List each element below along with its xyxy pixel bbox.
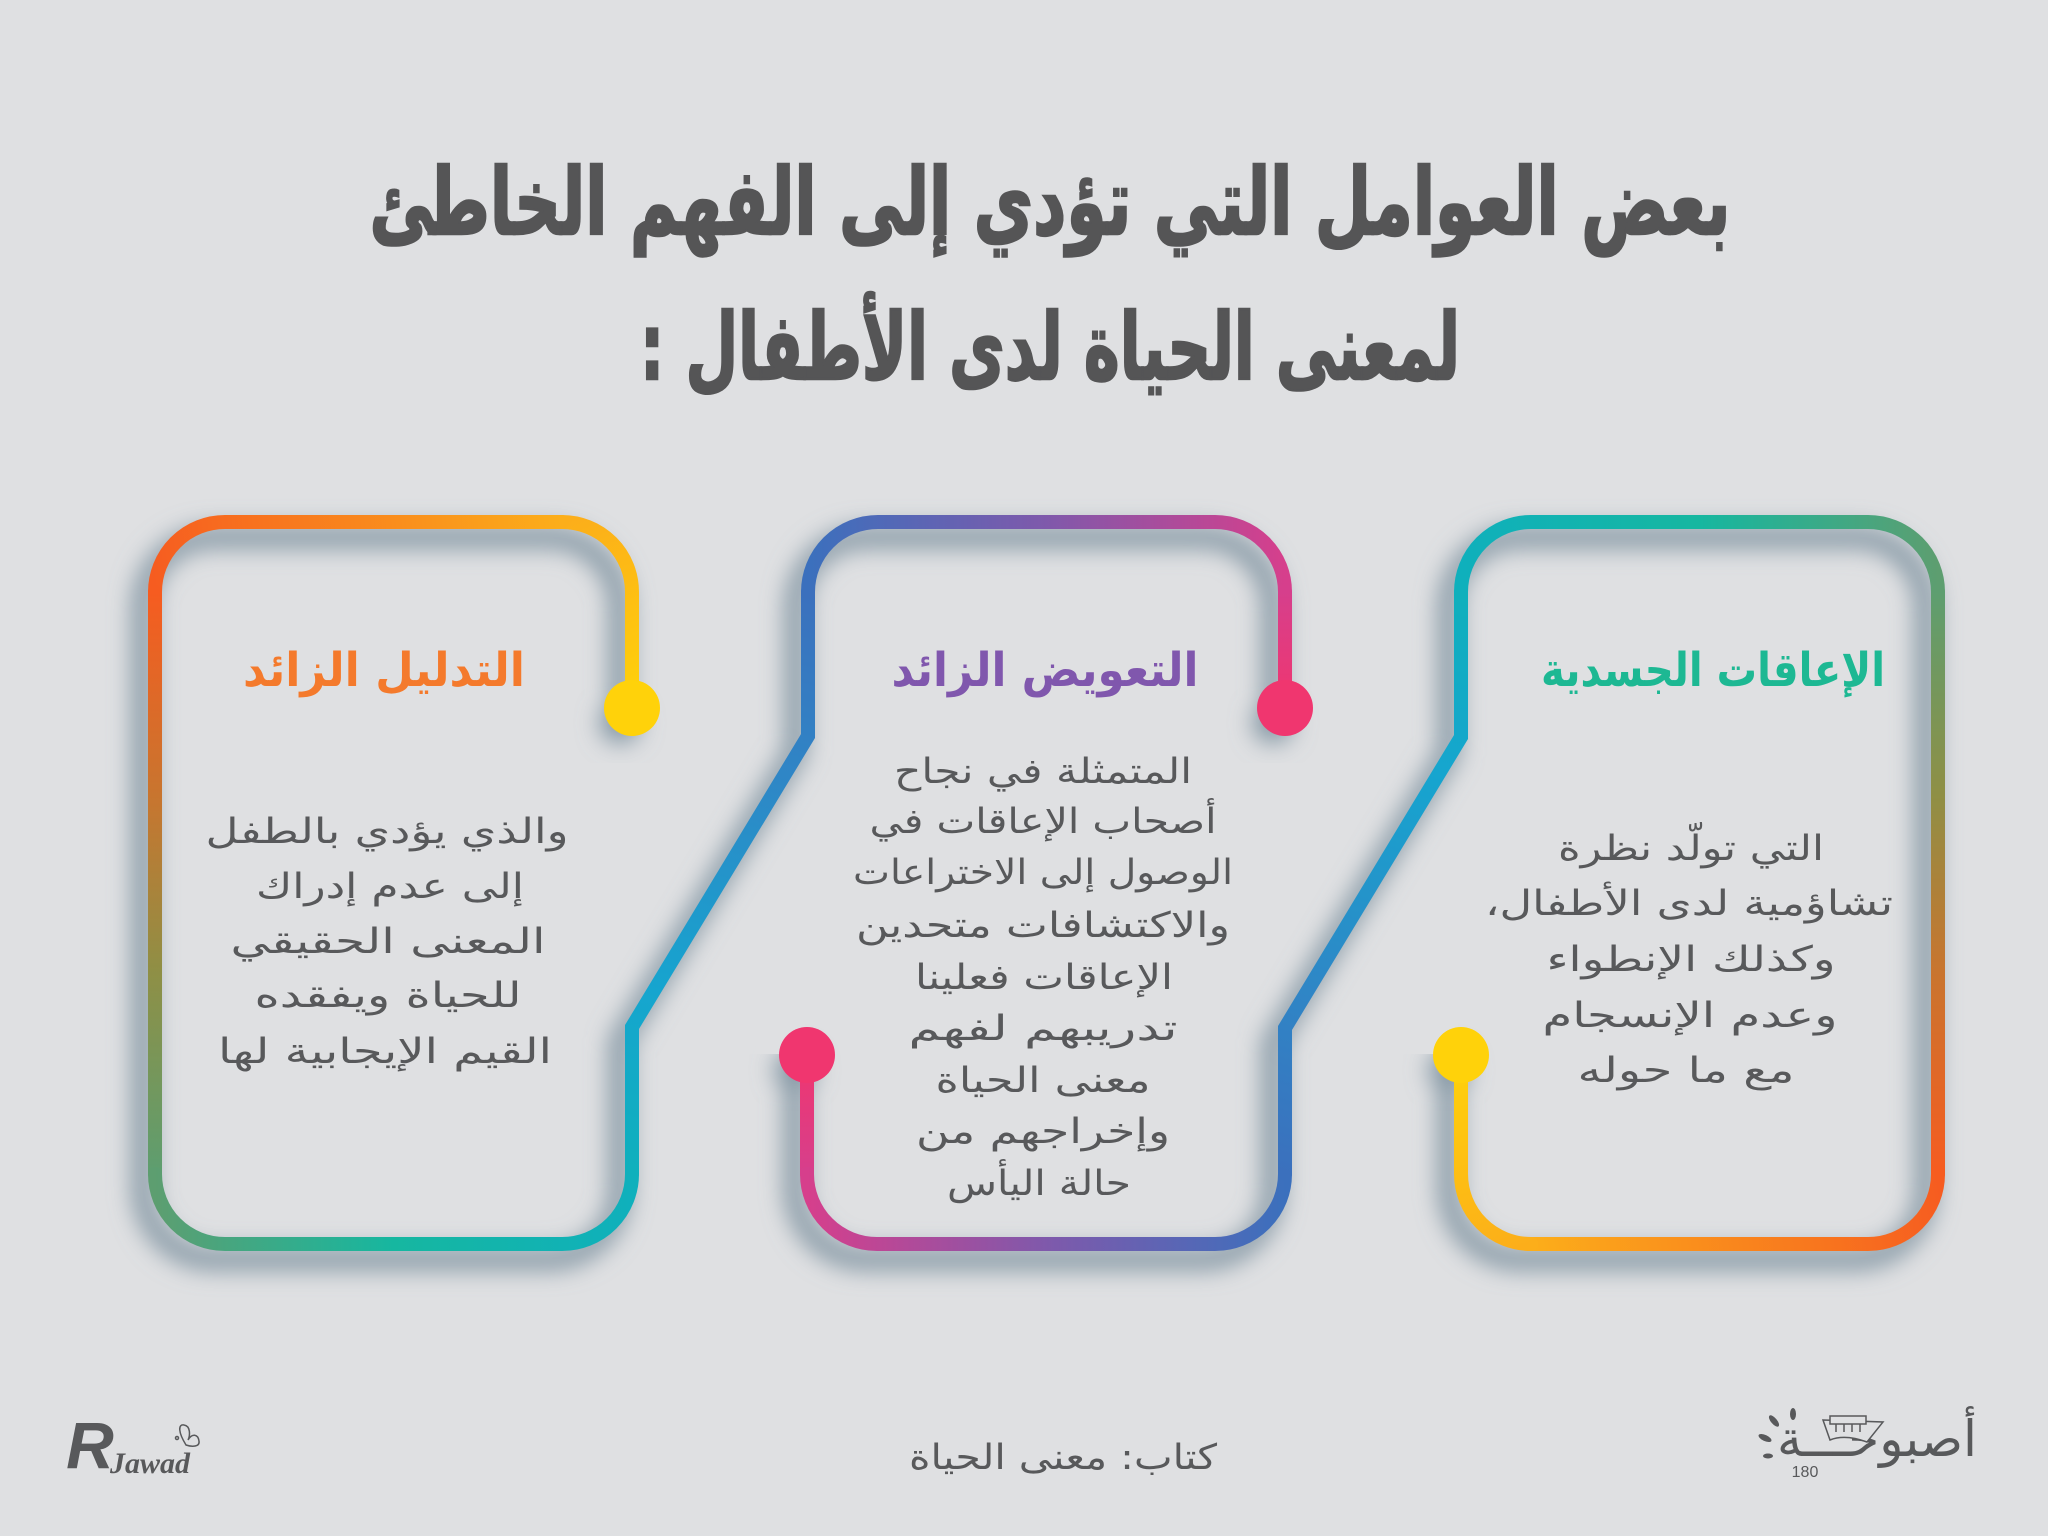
dot: yellow panel three	[1433, 1027, 1489, 1083]
heading: التعويض الزائد	[892, 643, 1198, 698]
panel: excessive compensation	[853, 643, 1233, 1204]
body text: مع ما حوله	[1578, 1051, 1794, 1091]
body text	[206, 812, 568, 1072]
body text: تدريبهم لفهم	[908, 1009, 1178, 1049]
connector: orange to pink line linking panels one and two	[155, 522, 1285, 1244]
panel: excessive pampering	[206, 643, 568, 1072]
body text: والذي يؤدي بالطفل	[206, 812, 568, 852]
icon: butterfly	[176, 1425, 199, 1446]
connector: pink to yellow line linking panels two and three	[807, 522, 1938, 1244]
logo: R Jawad signature: R	[66, 1408, 114, 1482]
body text: حالة اليأس	[947, 1159, 1131, 1204]
body text: وعدم الإنسجام	[1542, 996, 1838, 1036]
heading: الإعاقات الجسدية	[1541, 643, 1885, 698]
body text: تشاؤمية لدى الأطفال،	[1485, 881, 1893, 924]
body text: أصحاب الإعاقات في	[870, 798, 1216, 842]
dot: yellow panel one	[604, 680, 660, 736]
number 180: 180	[1792, 1464, 1818, 1481]
body text: إلى عدم إدراك	[256, 867, 524, 907]
dot: pink panel two bottom	[779, 1027, 835, 1083]
dot: pink panel two top	[1257, 680, 1313, 736]
shadow cut-off edges	[545, 763, 1458, 1054]
body text: معنى الحياة	[936, 1061, 1150, 1101]
connector shadows	[143, 537, 1926, 1259]
body text: التي تولّد نظرة	[1558, 821, 1824, 869]
panel: physical disabilities	[1485, 643, 1893, 1091]
body text: والاكتشافات متحدين	[856, 906, 1230, 946]
title: لمعنى الحياة لدى الأطفال :	[640, 292, 1460, 401]
body text: وكذلك الإنطواء	[1546, 940, 1836, 980]
body text: القيم الإيجابية لها	[218, 1032, 552, 1072]
body text: وإخراجهم من	[916, 1112, 1170, 1152]
heading: التدليل الزائد	[243, 643, 525, 698]
source citation: كتاب: معنى الحياة	[909, 1438, 1217, 1478]
body text: المعنى الحقيقي	[230, 922, 546, 962]
logo: Osboohat 180: أصبوحـــة	[1777, 1406, 1977, 1468]
body text	[1485, 821, 1893, 1091]
icon: open book	[1823, 1416, 1883, 1442]
body text: للحياة ويفقده	[254, 976, 522, 1016]
body text: الإعاقات فعلينا	[915, 958, 1173, 998]
body text	[853, 752, 1233, 1204]
title	[370, 149, 1730, 401]
logo: R Jawad signature: Jawad	[109, 1447, 191, 1480]
icon: sun rays	[1757, 1408, 1796, 1458]
body text: الوصول إلى الاختراعات	[853, 853, 1233, 893]
logo: R Jawad signature	[66, 1408, 199, 1482]
body text: المتمثلة في نجاح	[894, 752, 1192, 792]
